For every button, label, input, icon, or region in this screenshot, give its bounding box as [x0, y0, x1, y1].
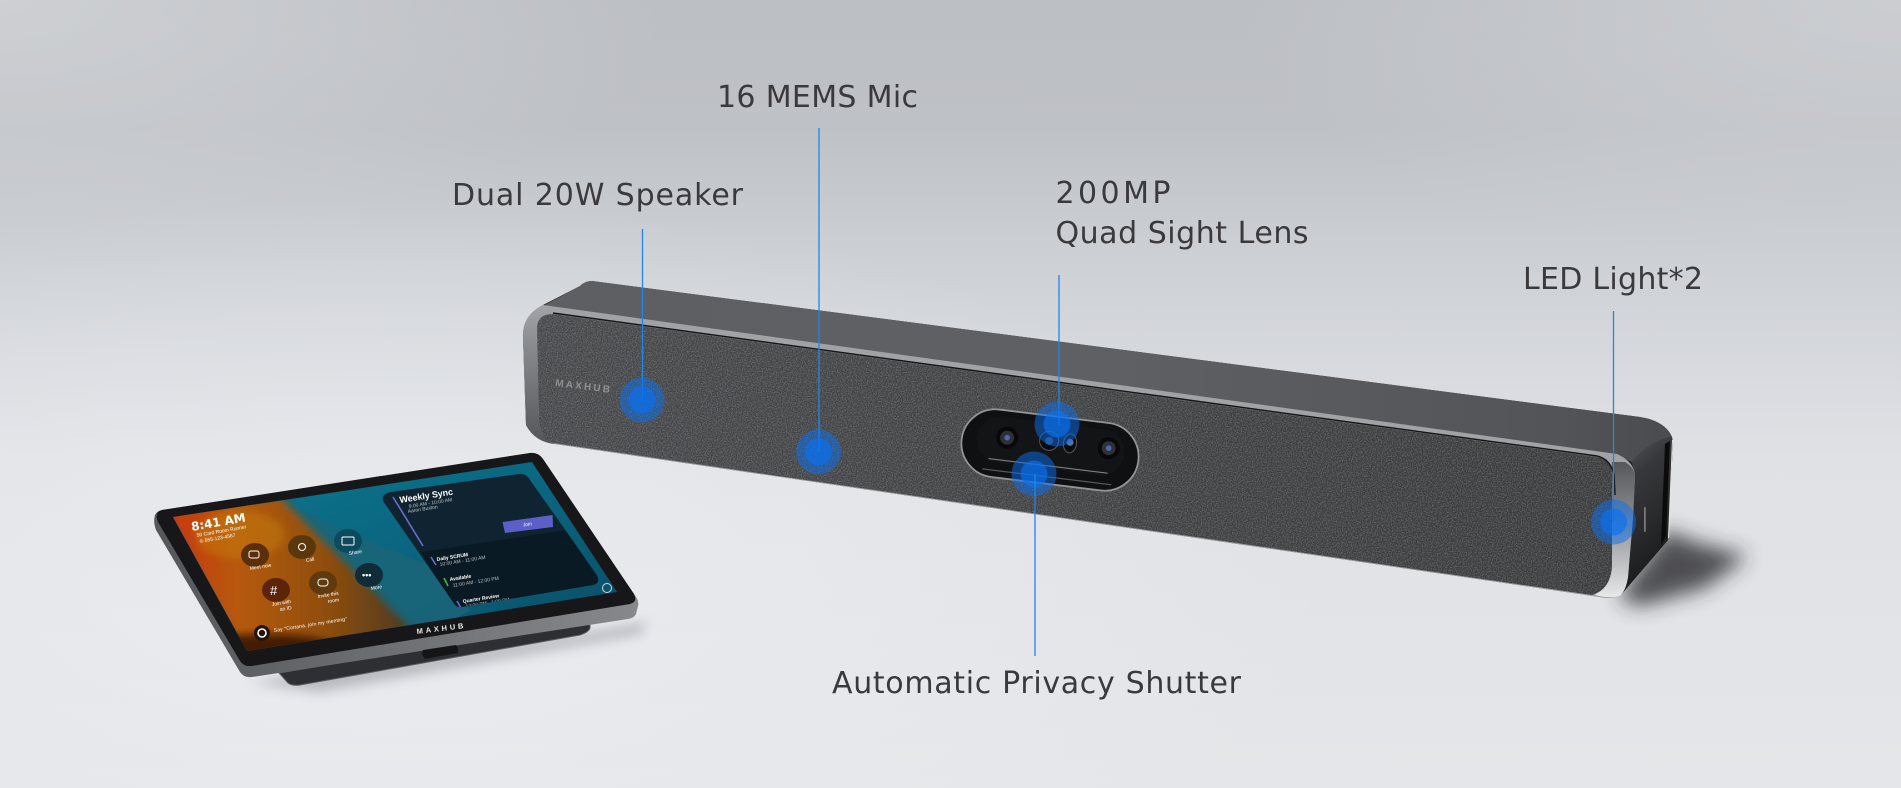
available entry: Available: [449, 574, 472, 583]
weekly sync title: Weekly Sync: [399, 487, 454, 505]
hotspot: [620, 378, 664, 422]
camera lower bright line: [988, 459, 1108, 473]
callout: LED Light*2: [1523, 262, 1703, 544]
more button: •••: [362, 570, 371, 580]
leader line: [642, 229, 644, 400]
label: Dual 20W Speaker: [452, 178, 744, 213]
left frame shading: [523, 305, 555, 444]
center lens: [1039, 430, 1060, 451]
label: LED Light*2: [1523, 262, 1703, 297]
phone number: © 555-123-4567: [199, 532, 236, 545]
hotspot: [1591, 500, 1636, 544]
meet now button: [241, 543, 272, 572]
callout: 16 MEMS Mic: [717, 80, 918, 474]
tablet edge notch: [422, 645, 458, 659]
side edge highlight: [1668, 440, 1672, 538]
hotspot: [1034, 402, 1080, 446]
label line 2: Quad Sight Lens: [1056, 216, 1308, 251]
room name: 50 Card Room Runner: [196, 524, 247, 539]
schedule list area: [421, 530, 605, 612]
callout: Dual 20W Speaker: [452, 178, 744, 422]
left lens: [995, 425, 1019, 450]
fabric top shadow line: [553, 313, 1615, 495]
join with ID button: Join with: [271, 599, 292, 608]
right frame shading: [1595, 462, 1635, 597]
info icon: [602, 584, 612, 592]
call button: Call: [305, 557, 315, 564]
hotspot: [796, 430, 841, 474]
more button: [355, 563, 383, 592]
join with ID button: [262, 578, 293, 613]
soundbar right side panel: [1620, 437, 1673, 596]
callout: Automatic Privacy Shutter: [832, 452, 1242, 701]
invite this room button: Invite this: [317, 591, 340, 600]
tablet MAXHUB logo: MAXHUB: [416, 621, 464, 636]
tablet stand: [279, 621, 590, 685]
MAXHUB logo: MAXHUB: [555, 378, 611, 396]
status panel: [380, 470, 605, 612]
meeting accent bar: [393, 497, 423, 546]
camera module: [958, 405, 1142, 495]
soundbar body silhouette: [523, 281, 1673, 598]
soundbar front silver frame: [523, 305, 1635, 598]
meeting time: 9:00 AM - 10:00 AM: [408, 497, 453, 510]
daily scrum entry: [430, 552, 486, 566]
cortana prompt: [254, 616, 348, 641]
organizer: Aaron Buxton: [407, 504, 438, 515]
label line 1: 200MP: [1056, 176, 1170, 211]
share button: [334, 529, 363, 557]
leader line: [818, 128, 820, 452]
fabric grille: [537, 314, 1612, 595]
leader line: [1034, 474, 1036, 656]
wallpaper lower dark corner: [236, 628, 330, 651]
soundbar video device: [523, 281, 1748, 606]
orange wallpaper: [165, 497, 412, 660]
more button: More: [370, 584, 383, 592]
daily scrum entry: Daily SCRUM: [436, 552, 469, 563]
meet now button: Meet now: [249, 563, 272, 572]
call button: [288, 535, 316, 564]
camera inner panel: [974, 414, 1127, 478]
label: 16 MEMS Mic: [717, 80, 918, 115]
join button: Join: [523, 521, 533, 528]
tablet shadow: [250, 622, 648, 692]
leader line: [1612, 311, 1614, 522]
invite this room button: room: [327, 597, 340, 605]
teal wallpaper: [170, 455, 620, 655]
right lens: [1096, 436, 1121, 460]
leader line: [1058, 275, 1060, 425]
join with ID button: #: [270, 583, 278, 598]
tablet body edge: [154, 453, 638, 677]
available entry: [443, 574, 499, 587]
share button: Share: [348, 549, 363, 557]
label: Automatic Privacy Shutter: [832, 666, 1242, 701]
hotspot: [1012, 452, 1056, 496]
join with ID button: an ID: [279, 605, 293, 613]
callout: 200MP Quad Sight Lens: [1034, 176, 1308, 446]
side port: [1644, 507, 1646, 532]
soundbar cast shadow: [1618, 530, 1748, 606]
side vent slot: [1661, 441, 1670, 545]
quarter review entry: Quarter Review: [462, 593, 500, 605]
wallpaper upper glow: [195, 511, 285, 559]
touch controller tablet: [154, 453, 648, 692]
wallpaper curve: [288, 504, 470, 626]
soundbar top surface: [543, 281, 1672, 462]
invite this room button: [309, 571, 340, 605]
cortana prompt: Say "Cortana, join my meeting": [273, 616, 348, 634]
camera housing: [958, 405, 1142, 495]
tele lens: [1062, 433, 1078, 454]
tablet black bezel: [157, 453, 635, 666]
tablet display: [173, 462, 617, 651]
camera shutter rail line: [982, 469, 1111, 485]
available entry: 11:00 AM - 12:00 PM: [452, 576, 499, 589]
join button: [502, 515, 553, 533]
time: 8:41 AM: [190, 511, 247, 534]
daily scrum entry: 10:00 AM - 11:00 AM: [439, 555, 486, 568]
quarter review entry: [456, 594, 510, 608]
quarter review entry: 12:00 PM - 1:00 PM: [465, 597, 510, 610]
